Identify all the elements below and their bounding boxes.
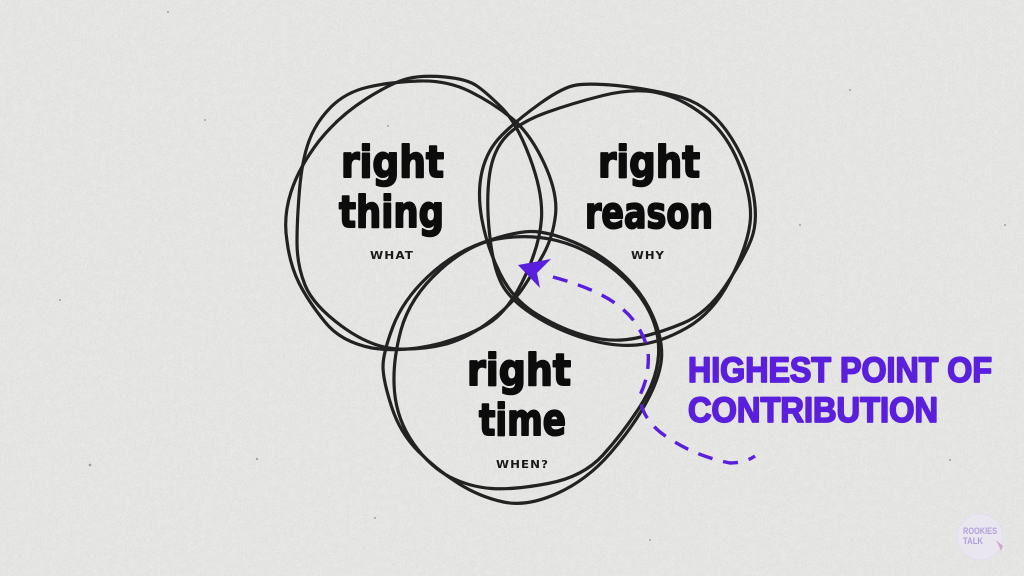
label: right reason: reason [585,188,713,239]
circle: right reason [480,84,755,345]
label: right time [467,345,571,471]
label: right thing [339,137,444,262]
label: right time: right [467,345,571,396]
circle: right time [383,231,662,503]
label: right reason [585,137,713,262]
heading: highest point of contribution: CONTRIBUTION [688,391,938,430]
logo: rookies talk [957,514,1003,560]
arrow: dashed curve to centre [518,259,755,463]
heading: highest point of contribution [688,351,992,430]
label: right time: WHEN? [496,458,549,471]
label: right thing: thing [339,187,444,238]
logo: rookies talk: ROOKIES [963,526,997,536]
circle: right thing [286,76,556,350]
label: right reason: WHY [631,249,665,262]
label: right thing: WHAT [370,249,414,262]
label: right reason: right [598,137,700,188]
logo: rookies talk: TALK [963,536,983,546]
heading: highest point of contribution: HIGHEST POINT OF [688,351,992,390]
label: right time: time [479,395,566,446]
venn diagram [286,76,755,503]
label: right thing: right [341,137,444,188]
